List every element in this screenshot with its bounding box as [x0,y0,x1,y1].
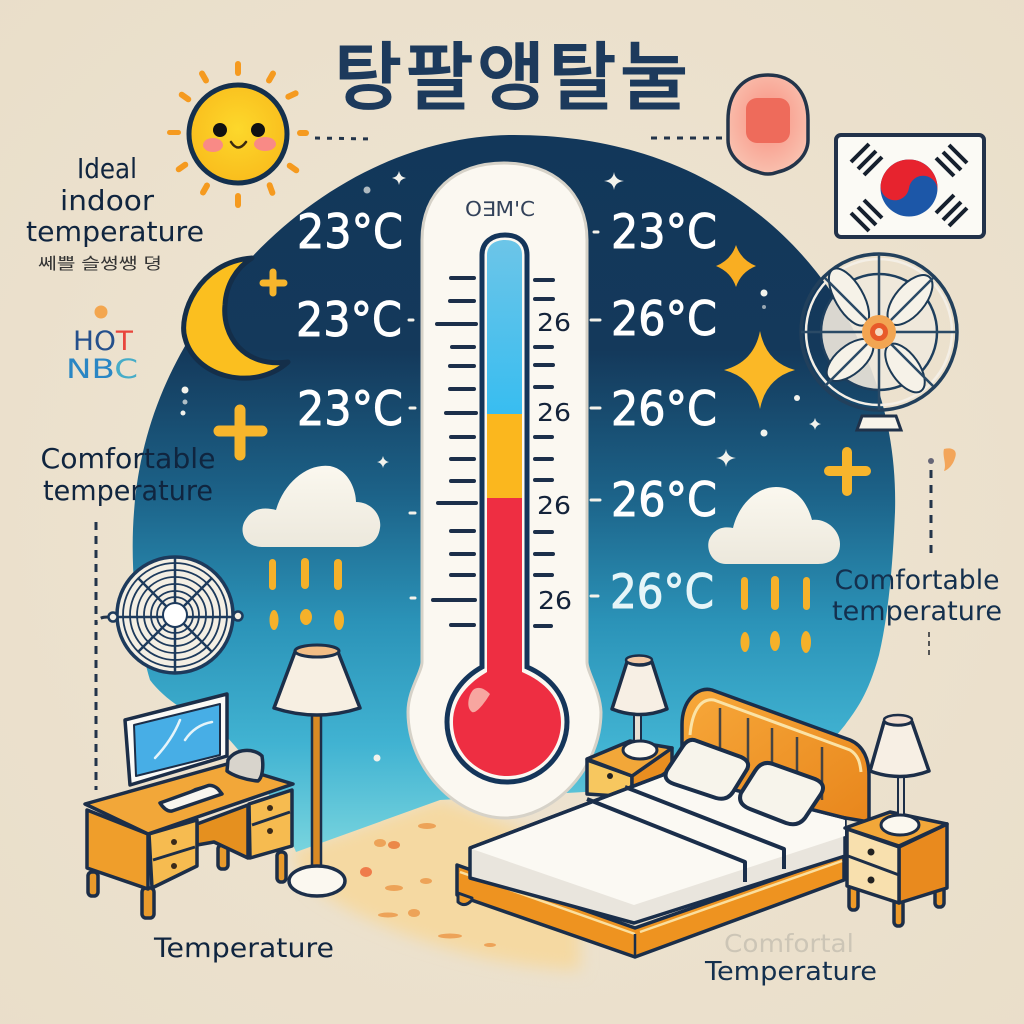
temperature labels right: 26°C [611,473,717,528]
nightstand left [587,741,672,797]
thermometer scale caption: O∃M'C [465,197,535,221]
label: temperature bottom right: Temperature [704,957,877,987]
temperature labels right: 26°C [610,565,714,620]
scale numbers [537,308,572,615]
thermometer [408,163,601,818]
temperature labels left: 23°C [297,382,403,437]
desk legs [88,845,286,918]
label: comfortable temperature right: Comfortable [834,565,1000,596]
desk [85,694,293,918]
desk gadget [227,750,263,781]
label: comfortable temperature left: temperature [43,474,213,507]
bed foot [458,893,472,905]
temperature labels right [610,205,717,620]
connector: right dashed line [928,448,956,658]
label: ideal indoor temperature: indoor [60,184,155,217]
bed [457,689,869,957]
connector: thermostat dashes [651,136,726,140]
floor debris [360,823,496,947]
icon: moon [184,258,288,378]
icon: Korean flag [836,135,984,237]
mattress [470,773,845,923]
decorative stars [180,171,866,762]
icon: fan right [801,254,957,430]
icon: sun [167,61,309,208]
temperature labels right: 23°C [611,205,717,260]
label: ideal indoor temperature: 쎄쁠 슬썽쌩 뎡 [38,250,162,274]
tick connectors [409,232,600,598]
bed sheet bands [587,787,784,882]
pillows [666,740,748,799]
computer monitor [125,694,227,797]
nightstand right [845,812,947,926]
label: comfortable temperature right [832,565,1002,627]
connector: left dashed line [96,522,108,790]
temperature labels left: 23°C [296,293,402,348]
keyboard [160,785,222,811]
bed frame [457,855,844,957]
label: ideal indoor temperature [26,152,204,274]
temperature labels right: 26°C [611,382,717,437]
tube outline and liquid [447,235,567,782]
label: comfortable temperature left [40,442,216,507]
icon: floor lamp [274,645,360,896]
label: hot: NB C [66,354,138,385]
rain right [740,576,811,653]
label: ideal indoor temperature: temperature [26,215,204,248]
label: comfortable temperature right: temperature [832,596,1002,627]
label: comfortable temperature left: Comfortable [40,442,216,475]
label: hot [66,306,138,385]
temperature labels left [296,205,403,437]
label: hot: HOT [73,326,134,357]
rain left [269,558,344,630]
title: 탕팔앵탈눌 [334,18,688,125]
scale ticks left [433,278,476,625]
label: faded comfortable: Comfortal [724,929,854,958]
scale numbers: 26 [537,491,571,520]
scale numbers: 26 [537,398,571,427]
temperature labels left: 23°C [297,205,403,260]
icon: thermostat [728,75,808,174]
sky circle [133,135,895,852]
icon: cloud right [708,487,840,564]
thermometer body [408,163,601,818]
floor sand [292,798,580,970]
temperature labels right: 26°C [611,292,717,347]
headboard [682,689,869,822]
scale numbers: 26 [537,308,571,337]
icon: cloud left [243,466,380,547]
label: ideal indoor temperature: Ideal [77,152,137,185]
connector: sun dashes [315,138,373,139]
bedside lamp left [612,656,667,759]
icon: wall fan left [108,557,242,673]
scale numbers: 26 [538,586,572,615]
bedside lamp right [870,715,929,835]
label: temperature bottom left: Temperature [153,933,334,964]
scale ticks right [535,280,553,626]
